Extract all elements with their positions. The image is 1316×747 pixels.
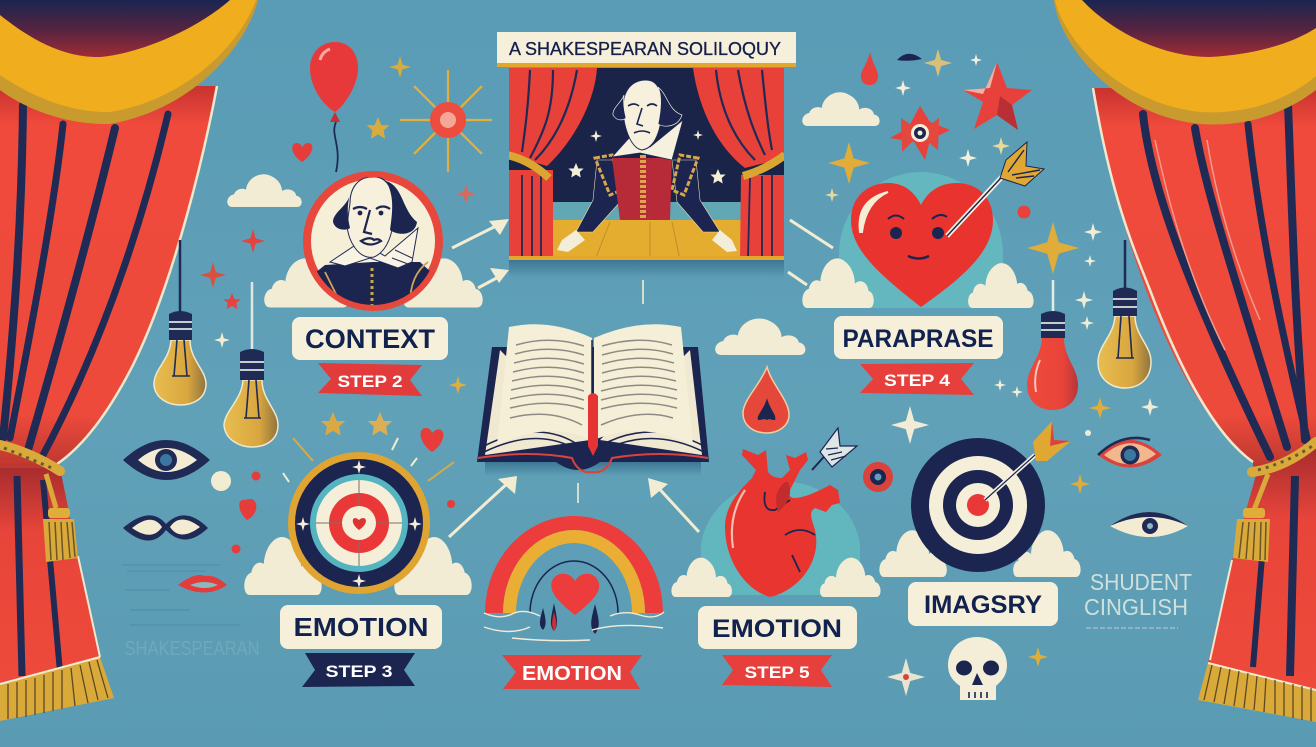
stage floor shadow <box>509 260 784 278</box>
red flower with eye <box>890 106 950 160</box>
arrow: stage to paraphrase <box>790 220 833 248</box>
label: emotion <box>280 605 442 649</box>
smiling heart <box>851 183 993 307</box>
label: paraphrase: PARAPRASE <box>842 325 994 353</box>
ribbon: emotion <box>502 655 642 689</box>
faded caption, lower left <box>122 565 260 660</box>
ribbon: step 4: STEP 4 <box>884 371 951 390</box>
red star <box>963 62 1032 130</box>
open book <box>477 324 709 476</box>
anatomical heart <box>725 428 857 597</box>
arrow: book to stage tick <box>642 280 644 304</box>
left curtain tie-back and tassel <box>0 445 78 562</box>
left stage curtain <box>0 86 217 721</box>
lips icon <box>178 575 227 592</box>
portrait of Shakespeare <box>300 171 445 320</box>
label: context: CONTEXT <box>305 324 435 354</box>
emotion target step <box>244 452 472 687</box>
arrow: stage to lower paraphrase <box>788 272 807 285</box>
faded caption, lower left: SHAKESPEARAN <box>124 638 260 660</box>
clouds beside heart <box>802 258 1034 308</box>
decorative stars and sparkles, left <box>200 42 492 554</box>
sun burst <box>400 70 492 172</box>
ribbon: step 2: STEP 2 <box>338 372 402 391</box>
arrow: rainbow to book tick <box>577 483 579 503</box>
arrow in heart <box>947 142 1044 236</box>
context step: portrait, label and ribbon <box>264 171 483 396</box>
faded caption, lower right <box>1084 569 1192 628</box>
label: context <box>292 317 448 360</box>
arrow: context to stage <box>452 219 509 248</box>
small teardrop <box>861 52 878 85</box>
small navy mark <box>897 54 922 61</box>
small cloud <box>802 92 880 126</box>
arrow: heart to book <box>648 478 699 532</box>
ribbon: step 5 <box>722 655 832 687</box>
clouds behind target <box>879 530 1081 577</box>
label: emotion: EMOTION <box>712 615 842 643</box>
right stage curtain drape <box>693 68 785 260</box>
ribbon: step 4 <box>860 363 974 395</box>
balloon <box>310 42 358 172</box>
left stage curtain drape <box>507 68 597 260</box>
stage scene <box>507 68 785 260</box>
small cloud above drop <box>715 318 805 355</box>
left curtain fringe <box>0 657 114 721</box>
left valance <box>0 0 258 124</box>
label: imagery <box>908 582 1058 626</box>
centre stage panel <box>497 32 796 278</box>
teal halo <box>839 172 1003 308</box>
rainbow emotion icon <box>484 516 664 689</box>
skull icon <box>948 637 1007 700</box>
clouds behind target <box>244 537 472 595</box>
label: emotion: EMOTION <box>294 612 428 642</box>
hanging light bulbs, left <box>154 240 278 447</box>
eye icons, right <box>1098 438 1188 537</box>
gold stage lip <box>509 256 784 260</box>
imagery step <box>879 421 1081 700</box>
arrow: emotion target to book <box>449 476 517 537</box>
blood drop <box>743 367 789 433</box>
right curtain fringe <box>1198 663 1316 722</box>
sparkle cluster near right bulb <box>891 223 1159 494</box>
ribbon: step 2 <box>318 363 422 396</box>
ribbon: step 3 <box>302 653 415 687</box>
hanging light bulbs, right <box>1027 240 1151 410</box>
anatomical heart step <box>671 428 881 687</box>
faded caption, lower right: CINGLISH <box>1084 594 1188 620</box>
bullseye target <box>911 421 1071 572</box>
right valance <box>1054 0 1316 125</box>
paraphrase step <box>802 49 1079 395</box>
label: paraphrase <box>834 316 1003 359</box>
right curtain tie-back and tassel <box>1233 442 1316 562</box>
ribbon: step 5: STEP 5 <box>744 663 810 682</box>
label: imagery: IMAGSRY <box>924 591 1042 619</box>
flow arrows <box>449 219 833 537</box>
small target icon <box>863 462 893 492</box>
title plaque <box>497 32 796 67</box>
faded caption, lower right: SHUDENT <box>1090 569 1192 595</box>
teal halo and clouds <box>671 481 881 597</box>
arrow in bullseye <box>985 421 1071 500</box>
arrow: lower context to stage <box>478 268 509 288</box>
small cloud, upper left <box>227 174 302 207</box>
title plaque: A SHAKESPEARAN SOLILOQUY <box>509 39 781 59</box>
right stage curtain <box>1093 88 1316 722</box>
emotion target dial <box>288 452 430 594</box>
Shakespeare figure <box>557 80 737 252</box>
eye icons, left <box>123 440 210 541</box>
label: emotion <box>698 606 857 649</box>
compass sparkle <box>887 658 925 696</box>
arrow fletching <box>812 428 857 470</box>
ribbon: step 3: STEP 3 <box>326 662 392 681</box>
ribbon: emotion: EMOTION <box>522 663 622 685</box>
clouds behind portrait <box>264 258 483 308</box>
